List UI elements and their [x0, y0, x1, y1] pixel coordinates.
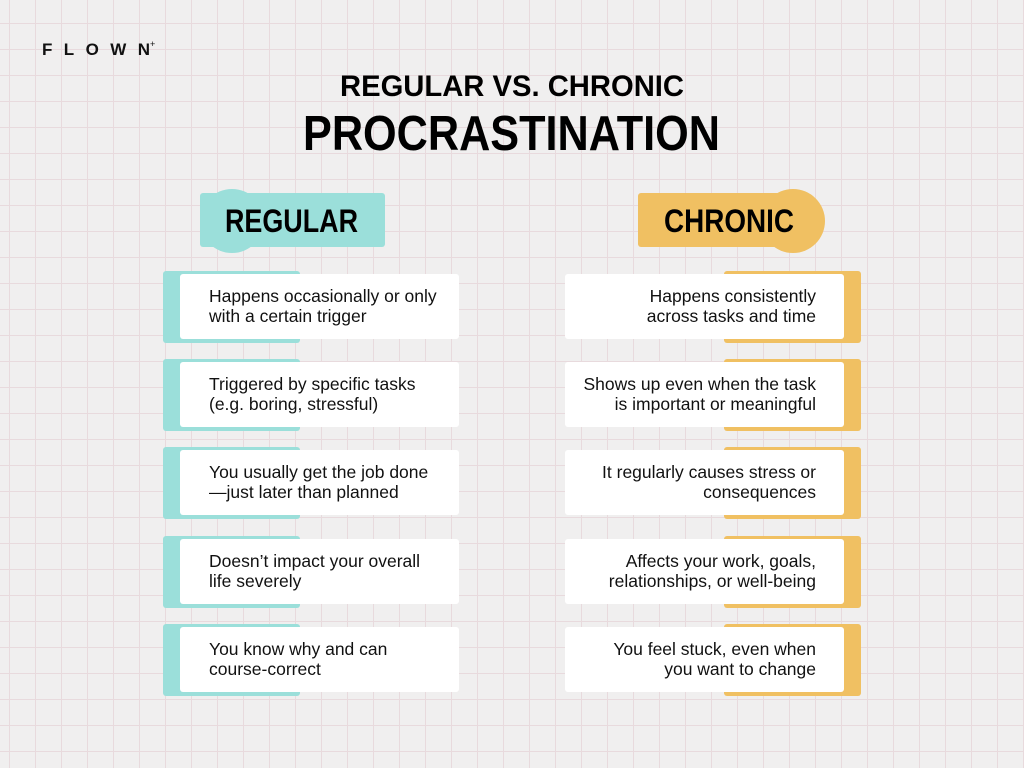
item: chronic 5: you want to change: [664, 658, 816, 678]
header: regular: [200, 189, 385, 253]
item: regular 2: (e.g. boring, stressful): [209, 394, 378, 414]
item: chronic 4: relationships, or well-being: [609, 570, 816, 590]
panel: regular column: [163, 271, 459, 696]
item: regular 2: [163, 359, 459, 431]
header: chronic: CHRONIC: [664, 203, 794, 239]
item: regular 5: course-correct: [209, 658, 321, 678]
item: regular 5: You know why and can: [209, 639, 387, 659]
item: regular 3: You usually get the job done: [209, 462, 428, 482]
item: regular 1: Happens occasionally or only: [209, 286, 437, 306]
item: chronic 2: is important or meaningful: [615, 394, 816, 414]
item: chronic 2: Shows up even when the task: [583, 374, 816, 394]
item: chronic 3: consequences: [703, 482, 816, 502]
item: regular 1: [163, 271, 459, 343]
item: chronic 3: [565, 447, 861, 519]
header: regular: REGULAR: [225, 203, 358, 239]
item: chronic 4: [565, 536, 861, 608]
item: chronic 4: Affects your work, goals,: [626, 551, 816, 571]
item: chronic 1: [565, 271, 861, 343]
logo: FLOWN: [42, 40, 150, 59]
logo: +: [150, 39, 155, 49]
item: chronic 3: It regularly causes stress or: [602, 462, 816, 482]
item: chronic 5: [565, 624, 861, 696]
item: regular 4: life severely: [209, 570, 301, 590]
item: chronic 2: [565, 359, 861, 431]
item: regular 3: [163, 447, 459, 519]
item: regular 4: [163, 536, 459, 608]
item: chronic 1: Happens consistently: [650, 286, 816, 306]
title: [303, 70, 720, 158]
item: chronic 1: across tasks and time: [647, 306, 816, 326]
item: regular 2: Triggered by specific tasks: [209, 374, 416, 394]
item: chronic 5: You feel stuck, even when: [613, 639, 816, 659]
item: regular 5: [163, 624, 459, 696]
title: REGULAR VS. CHRONIC: [340, 70, 684, 103]
item: regular 3: —just later than planned: [209, 482, 399, 502]
header: chronic: [638, 189, 825, 253]
item: regular 1: with a certain trigger: [209, 306, 367, 326]
item: regular 4: Doesn’t impact your overall: [209, 551, 420, 571]
